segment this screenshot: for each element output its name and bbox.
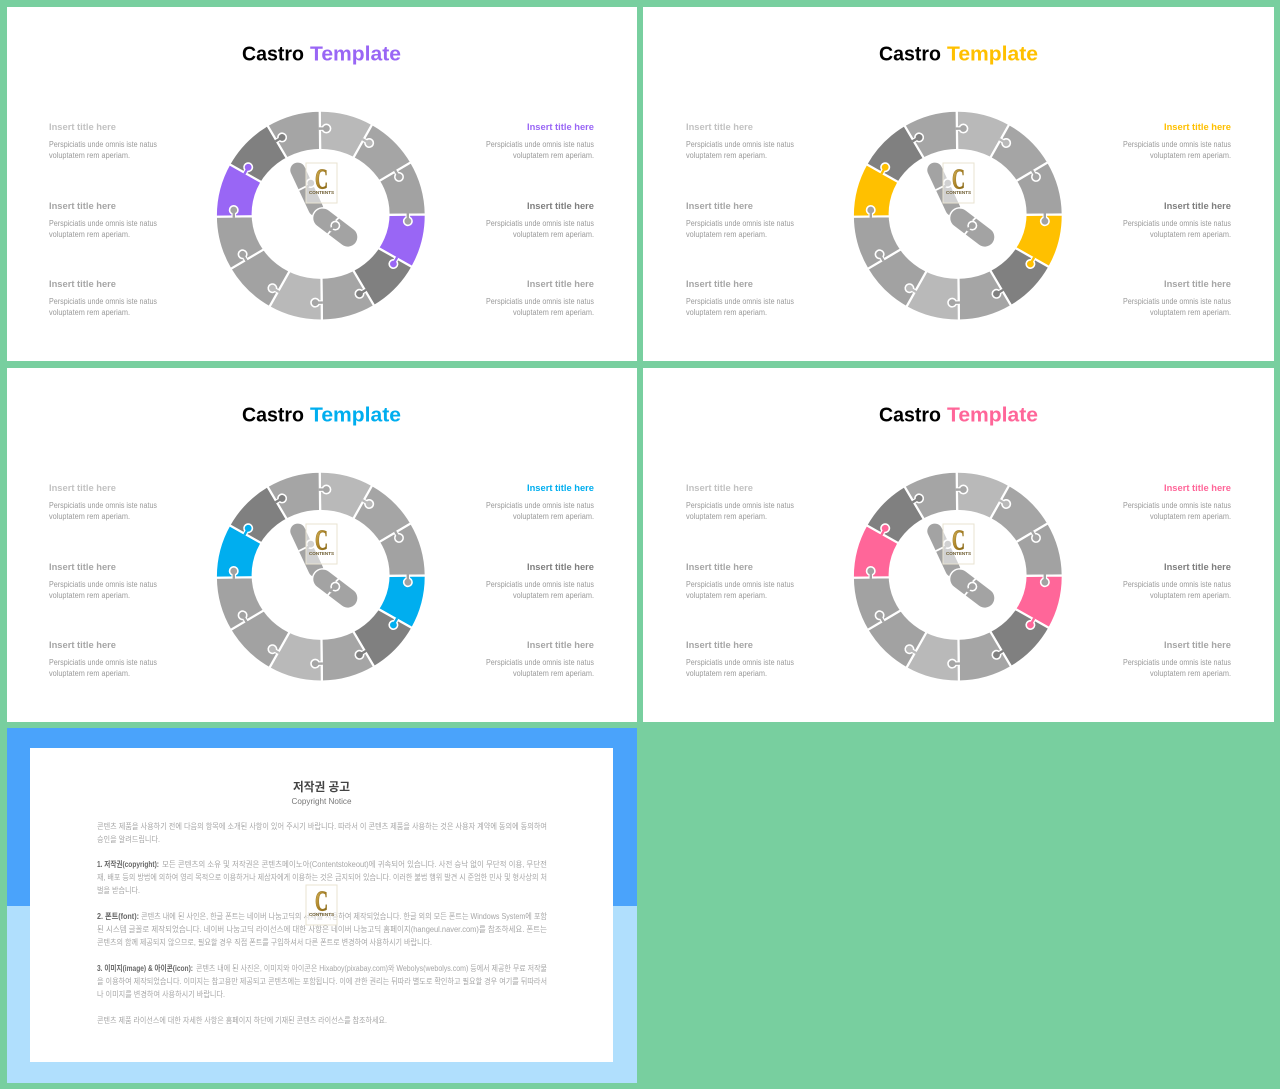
- left text blocks: voluptatem rem aperiam.: [49, 230, 130, 239]
- left text blocks: voluptatem rem aperiam.: [49, 151, 130, 160]
- puzzle clock wheel: [852, 110, 1064, 322]
- right text blocks: Perspiciatis unde omnis iste natus: [486, 297, 594, 306]
- left text blocks: Perspiciatis unde omnis iste natus: [686, 501, 794, 510]
- right text blocks: Perspiciatis unde omnis iste natus: [1123, 140, 1231, 149]
- right text blocks: Insert title here: [1164, 201, 1231, 212]
- right text blocks: Perspiciatis unde omnis iste natus: [486, 501, 594, 510]
- heading: Castro: [879, 404, 941, 426]
- left text blocks: voluptatem rem aperiam.: [49, 308, 130, 317]
- clause 3: 나 이미지를 변경하여 사용하시기 바랍니다.: [97, 989, 225, 999]
- right text blocks: Insert title here: [1164, 562, 1231, 573]
- right text blocks: [1123, 483, 1231, 678]
- heading: Castro: [242, 42, 304, 66]
- clause 2: 콘텐츠의 함께 제공되지 않으므로, 필요할 경우 직접 폰트를 구입하셔서 다른 폰트로 변경하여 사용하시기 바랍니다.: [97, 937, 432, 947]
- heading: Template: [310, 404, 401, 426]
- left text blocks: Perspiciatis unde omnis iste natus: [686, 297, 794, 306]
- left text blocks: [49, 483, 157, 678]
- left text blocks: voluptatem rem aperiam.: [49, 591, 130, 600]
- right text blocks: voluptatem rem aperiam.: [513, 591, 594, 600]
- left text blocks: Perspiciatis unde omnis iste natus: [49, 219, 157, 228]
- heading: Castro: [879, 42, 941, 66]
- clause 1: 모든 콘텐츠의 소유 및 저작권은 콘텐츠메이노아(Contentstokeout)에 귀속되어 있습니다. 사전 승낙 없이 무단적 이용, 무단전: [162, 859, 547, 869]
- copyright heading: 저작권 공고: [293, 779, 350, 794]
- puzzle clock wheel: [215, 110, 427, 322]
- logo watermark: [306, 885, 337, 925]
- heading: [879, 42, 1038, 66]
- heading: [879, 404, 1038, 426]
- heading: [242, 42, 401, 66]
- right text blocks: Insert title here: [1164, 483, 1231, 494]
- right text blocks: Perspiciatis unde omnis iste natus: [486, 219, 594, 228]
- clause 3: 을 이용하여 제작되었습니다. 이미지는 참고용만 제공되고 콘텐츠에는 포함됩니다. 이에 관한 권리는 뒤따라 별도로 확인하고 필요할 경우 여기를 뒤따라서: [97, 976, 547, 986]
- right text blocks: Insert title here: [527, 562, 594, 573]
- panel: purple slide: [7, 7, 637, 361]
- left text blocks: [686, 483, 794, 678]
- right text blocks: Perspiciatis unde omnis iste natus: [1123, 580, 1231, 589]
- left text blocks: Insert title here: [49, 122, 116, 133]
- left text blocks: Insert title here: [686, 279, 753, 290]
- right text blocks: voluptatem rem aperiam.: [1150, 151, 1231, 160]
- right text blocks: voluptatem rem aperiam.: [1150, 308, 1231, 317]
- right text blocks: Insert title here: [527, 483, 594, 494]
- right text blocks: voluptatem rem aperiam.: [513, 230, 594, 239]
- left text blocks: voluptatem rem aperiam.: [49, 669, 130, 678]
- right text blocks: [1123, 122, 1231, 317]
- clause 2: [97, 911, 548, 947]
- clause 1: 1. 저작권(copyright):: [97, 859, 159, 869]
- clause 2: 콘텐츠 내에 된 사인은, 한글 폰트는 네이버 나눔고딕의 서체를 사용하여 제작되었습니다. 한글 외의 모든 폰트는 Windows System에 포함: [141, 911, 548, 921]
- left text blocks: Insert title here: [686, 122, 753, 133]
- heading: Castro: [242, 404, 304, 426]
- left text blocks: Perspiciatis unde omnis iste natus: [49, 580, 157, 589]
- left text blocks: Insert title here: [49, 640, 116, 651]
- puzzle clock wheel: [852, 471, 1064, 683]
- left text blocks: Perspiciatis unde omnis iste natus: [686, 140, 794, 149]
- right text blocks: Insert title here: [527, 279, 594, 290]
- right text blocks: voluptatem rem aperiam.: [513, 669, 594, 678]
- heading: Template: [310, 42, 401, 66]
- right text blocks: voluptatem rem aperiam.: [1150, 669, 1231, 678]
- intro paragraph: 콘텐츠 제품을 사용하기 전에 다음의 항목에 소개된 사항이 있어 주시기 바랍니다. 따라서 이 콘텐츠 제품을 사용하는 것은 사용자 계약에 동의에 동의하여: [97, 821, 547, 831]
- clause 3: [97, 963, 547, 999]
- right text blocks: voluptatem rem aperiam.: [1150, 512, 1231, 521]
- right text blocks: Perspiciatis unde omnis iste natus: [1123, 219, 1231, 228]
- left text blocks: Insert title here: [49, 201, 116, 212]
- left text blocks: voluptatem rem aperiam.: [686, 512, 767, 521]
- left text blocks: voluptatem rem aperiam.: [686, 308, 767, 317]
- right text blocks: voluptatem rem aperiam.: [1150, 230, 1231, 239]
- left text blocks: [686, 122, 794, 317]
- panel: blue slide: [7, 368, 637, 722]
- right text blocks: Perspiciatis unde omnis iste natus: [486, 140, 594, 149]
- right text blocks: Perspiciatis unde omnis iste natus: [1123, 658, 1231, 667]
- right text blocks: [486, 483, 594, 678]
- left text blocks: voluptatem rem aperiam.: [686, 669, 767, 678]
- heading: Template: [947, 404, 1038, 426]
- right text blocks: voluptatem rem aperiam.: [1150, 591, 1231, 600]
- puzzle clock wheel: [215, 471, 427, 683]
- right text blocks: Insert title here: [527, 640, 594, 651]
- left text blocks: Perspiciatis unde omnis iste natus: [49, 501, 157, 510]
- intro paragraph: [97, 821, 547, 844]
- right text blocks: Insert title here: [527, 122, 594, 133]
- left text blocks: voluptatem rem aperiam.: [686, 591, 767, 600]
- heading: Template: [947, 42, 1038, 66]
- heading: [242, 404, 401, 426]
- clause 2: 된 시스템 글꼴로 제작되었습니다. 네이버 나눔고딕 라이선스에 대한 사항은 네이버 나눔고딕 홈페이지(hangeul.naver.com)를 참조하세요. 폰트는: [97, 924, 547, 934]
- right text blocks: Perspiciatis unde omnis iste natus: [1123, 501, 1231, 510]
- left text blocks: Perspiciatis unde omnis iste natus: [686, 658, 794, 667]
- left text blocks: Perspiciatis unde omnis iste natus: [49, 297, 157, 306]
- left text blocks: voluptatem rem aperiam.: [686, 151, 767, 160]
- right text blocks: Insert title here: [1164, 122, 1231, 133]
- clause 2: 2. 폰트(font):: [97, 912, 139, 921]
- right text blocks: Perspiciatis unde omnis iste natus: [486, 580, 594, 589]
- left text blocks: voluptatem rem aperiam.: [49, 512, 130, 521]
- left text blocks: Insert title here: [686, 201, 753, 212]
- copyright subheading: Copyright Notice: [292, 796, 352, 806]
- clause 3: 3. 이미지(image) & 아이콘(icon):: [97, 963, 193, 973]
- clause 3: 콘텐츠 내에 된 사진은, 이미지와 아이콘은 Hixaboy(pixabay.com)와 Webolys(webolys.com) 등에서 제공한 무료 저작물: [196, 963, 547, 973]
- left text blocks: Perspiciatis unde omnis iste natus: [49, 140, 157, 149]
- right text blocks: Perspiciatis unde omnis iste natus: [1123, 297, 1231, 306]
- logo watermark: [943, 524, 974, 564]
- left text blocks: [49, 122, 157, 317]
- right text blocks: [486, 122, 594, 317]
- left text blocks: Insert title here: [686, 483, 753, 494]
- intro paragraph: 승인을 알려드립니다.: [97, 834, 160, 844]
- left text blocks: Insert title here: [49, 279, 116, 290]
- closing line: 콘텐츠 제품 라이선스에 대한 자세한 사항은 홈페이지 하단에 기재된 콘텐츠 라이선스를 참조하세요.: [97, 1015, 387, 1025]
- clause 1: 벌을 받습니다.: [97, 885, 140, 895]
- left text blocks: Insert title here: [49, 483, 116, 494]
- left text blocks: Perspiciatis unde omnis iste natus: [49, 658, 157, 667]
- right text blocks: Insert title here: [527, 201, 594, 212]
- clause 1: 재, 배포 등의 방법에 의하여 영리 목적으로 이용하거나 제삼자에게 이용하는 것은 금지되어 있습니다. 이러한 불법 행위 발견 시 준엄한 민사 및 형사상의 처: [97, 872, 547, 882]
- right text blocks: voluptatem rem aperiam.: [513, 308, 594, 317]
- clause 1: [97, 859, 547, 895]
- left text blocks: voluptatem rem aperiam.: [686, 230, 767, 239]
- logo watermark: [306, 163, 337, 203]
- left text blocks: Perspiciatis unde omnis iste natus: [686, 580, 794, 589]
- left text blocks: Insert title here: [49, 562, 116, 573]
- right text blocks: voluptatem rem aperiam.: [513, 512, 594, 521]
- right text blocks: Perspiciatis unde omnis iste natus: [486, 658, 594, 667]
- right text blocks: voluptatem rem aperiam.: [513, 151, 594, 160]
- panel: yellow slide: [643, 7, 1274, 361]
- left text blocks: Insert title here: [686, 562, 753, 573]
- logo watermark: [943, 163, 974, 203]
- right text blocks: Insert title here: [1164, 640, 1231, 651]
- logo watermark: [306, 524, 337, 564]
- panel: copyright notice: [7, 728, 637, 1083]
- left text blocks: Perspiciatis unde omnis iste natus: [686, 219, 794, 228]
- panel: pink slide: [643, 368, 1274, 722]
- left text blocks: Insert title here: [686, 640, 753, 651]
- right text blocks: Insert title here: [1164, 279, 1231, 290]
